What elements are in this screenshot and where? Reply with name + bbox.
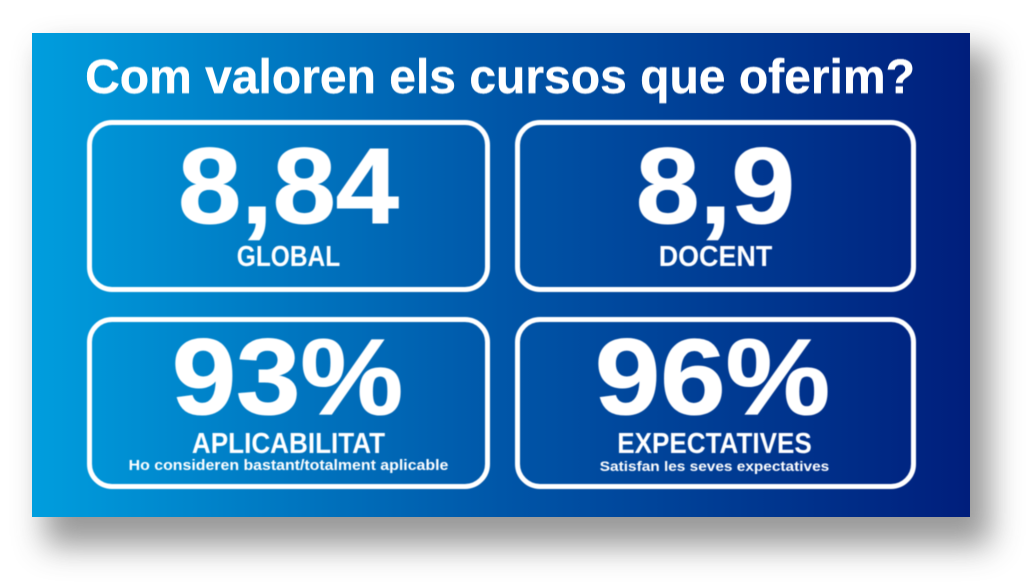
panel: teaching score (515, 120, 916, 292)
label: docent: DOCENT (659, 241, 772, 273)
number: 8,9: 8,9 (636, 125, 795, 246)
panel: expectations (515, 317, 916, 489)
panel: global score (87, 120, 490, 292)
number: 8,84: 8,84 (178, 125, 399, 246)
number: 93%: 93% (172, 316, 403, 437)
caption: expectations: Satisfan les seves expectatives (600, 458, 829, 474)
drop shadow (45, 50, 990, 546)
title: Com valoren els cursos que oferim? (85, 50, 915, 104)
label: global: GLOBAL (237, 241, 340, 273)
number: 96%: 96% (595, 316, 830, 437)
panel: applicability (87, 317, 490, 489)
caption: applicability: Ho consideren bastant/totalment aplicable (129, 458, 448, 474)
label: expectations: EXPECTATIVES (617, 428, 812, 460)
panel: background (32, 33, 970, 517)
label: applicability: APLICABILITAT (192, 428, 385, 460)
